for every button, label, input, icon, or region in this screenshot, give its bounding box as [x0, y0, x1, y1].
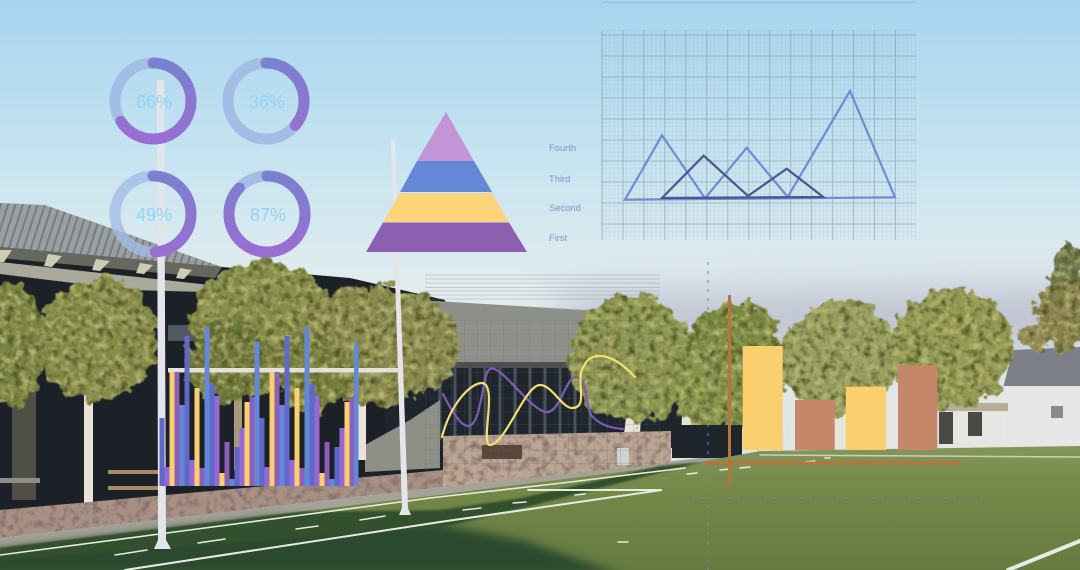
donut: 36%: [228, 63, 304, 139]
legend label: first: First: [549, 232, 568, 243]
x axis: [704, 462, 960, 464]
pyramid tier: third: [400, 161, 492, 192]
centre building: [365, 300, 730, 472]
grass field: [0, 446, 1080, 570]
column chart: [160, 327, 358, 486]
field markings: [0, 455, 1080, 570]
top rule: [602, 2, 916, 3]
right building: [790, 347, 1080, 447]
dark peaks series: [662, 156, 823, 198]
pyramid tier: fourth: [417, 112, 474, 161]
y axis: [728, 295, 731, 487]
line chart on grid: [601, 30, 916, 240]
chart grid: [601, 30, 916, 240]
pyramid chart: [366, 112, 527, 252]
bar chart: [704, 295, 960, 487]
bar 3: [846, 387, 886, 450]
legend label: third: Third: [549, 173, 570, 184]
pyramid tier: first: [366, 222, 527, 252]
wave chart grid: [425, 275, 660, 470]
vertical dashed guide: [707, 262, 709, 570]
legend label: second: Second: [549, 202, 581, 213]
donut: 66%: [115, 63, 191, 139]
goal post: left upright: [154, 80, 171, 549]
legend label: fourth: Fourth: [549, 142, 576, 153]
bar 4: [898, 365, 937, 450]
blue peaks series: [625, 91, 895, 200]
wave chart: purple line: [443, 368, 623, 429]
field shadow: [0, 462, 702, 570]
donut: 49%: [115, 176, 191, 252]
donut: 49%: 49%: [136, 205, 172, 225]
goal post: crossbar: [168, 368, 401, 372]
horizontal dashed guide: [683, 497, 985, 499]
wave chart: yellow line: [442, 356, 635, 445]
donut: 87%: 87%: [250, 205, 286, 225]
trees: [0, 244, 1080, 505]
pyramid tier: second: [383, 193, 509, 222]
pyramid legend: [549, 142, 581, 243]
bar 1: [743, 346, 783, 450]
bar 2: [795, 400, 835, 450]
left building: [0, 203, 445, 525]
donut: 87%: [229, 176, 305, 252]
donut: 66%: 66%: [136, 92, 172, 112]
donut: 36%: 36%: [249, 92, 285, 112]
goal post: right upright: [391, 140, 411, 515]
low brick walls and paving: [0, 425, 742, 549]
